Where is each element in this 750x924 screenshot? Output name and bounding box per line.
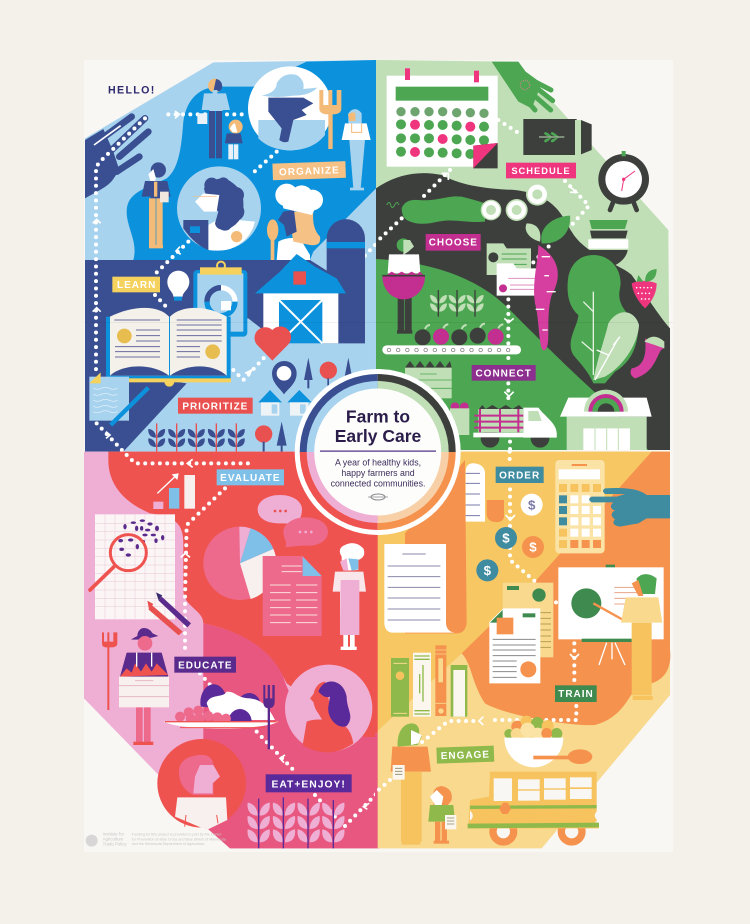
icon: document page [489, 608, 540, 683]
dotted path: hello [168, 108, 247, 120]
footer: credits [86, 832, 227, 847]
dotted path: connect [502, 299, 514, 362]
label: schedule [506, 163, 576, 178]
green hill [376, 259, 648, 450]
chart: pie [203, 527, 277, 600]
panel: bottom right orange quadrant [375, 452, 670, 848]
icon: hand [85, 117, 148, 198]
orange top right and blob [462, 452, 670, 725]
icon: calculator [555, 460, 605, 553]
icon: radish [526, 216, 570, 350]
dotted path: eat lower [315, 795, 335, 817]
icons: coins: $ [502, 531, 510, 546]
label: learn: LEARN [117, 280, 156, 291]
label: train: TRAIN [558, 689, 594, 700]
blue blob [127, 60, 376, 260]
inner ring: bottom left [307, 452, 378, 523]
icon: pitchfork [319, 90, 341, 149]
heading: hello: HELLO! [108, 85, 156, 97]
inner ring: bottom right [378, 452, 449, 523]
icon: silo [327, 219, 365, 343]
footer: credits: and the Minnesota Department of Agriculture. [132, 842, 205, 846]
icon: pointing hand [589, 488, 670, 527]
title text: Farm to [346, 406, 410, 426]
subtitle: happy farmers and [341, 468, 415, 478]
icon: fork [263, 685, 275, 749]
icon: farm truck [473, 405, 557, 448]
dotted path: engage left [418, 721, 473, 745]
dotted path: schedule [498, 120, 522, 135]
dotted path: train [568, 643, 580, 682]
icon: open book [106, 308, 231, 387]
footer: credits: Agriculture [103, 837, 124, 842]
chart: graph paper [95, 514, 175, 619]
title badge [295, 369, 461, 535]
icon: presentation board [558, 565, 664, 665]
pale green base [376, 60, 670, 450]
icon: pitchfork [102, 632, 117, 710]
chart: bars with arrow [153, 473, 195, 509]
icon: purple crayon [156, 592, 191, 627]
footer: credits: for Prevention at Blue Cross and Blue Shield of Minnesota [132, 837, 227, 841]
icon: magnifying glass [90, 535, 146, 590]
icon: red crayon [147, 601, 183, 635]
label: prioritize: PRIORITIZE [182, 401, 248, 412]
ring: top left [300, 374, 378, 452]
dot: chart link [554, 600, 558, 604]
icons: coins: $ [484, 563, 492, 578]
dotted path: truck [504, 442, 516, 453]
label: train [555, 685, 597, 702]
icons: houses [258, 390, 312, 416]
chevrons [181, 459, 369, 809]
dotted path: order down [510, 489, 537, 583]
icon: second crate [450, 402, 469, 435]
red left edge [375, 530, 378, 733]
dotted path: bottom left [377, 780, 390, 792]
icon: light bulb [167, 271, 189, 301]
label: engage: ENGAGE [441, 749, 490, 762]
badge ring [295, 369, 461, 535]
portrait: woman with glasses [177, 166, 261, 251]
icon: open document [263, 556, 322, 636]
icons: village trees [304, 358, 353, 388]
dotted path: organize [250, 152, 277, 176]
dotted path: evaluate down [185, 488, 225, 653]
label: evaluate: EVALUATE [220, 473, 280, 484]
dotted path: book [233, 357, 265, 380]
chevrons [442, 173, 577, 396]
dotted path: choose top [422, 170, 450, 198]
dotted path: schedule down [565, 181, 589, 225]
icon: bowls [588, 220, 628, 267]
person: farmer with crate [119, 628, 169, 745]
dotted path: folders [533, 243, 552, 262]
person: teacher [391, 723, 431, 845]
icon: chili pepper [631, 337, 664, 378]
yellow base [375, 452, 670, 848]
ring: top right [378, 374, 456, 452]
portrait: farmer in hat [248, 66, 332, 150]
icons: seedlings [430, 290, 484, 317]
label: learn [112, 277, 160, 292]
icon: notepad [89, 372, 129, 421]
icon: conveyor belt [382, 345, 521, 354]
dotted path: learn up [154, 242, 188, 275]
upper yellow [375, 452, 670, 733]
portrait: child [157, 739, 246, 830]
icon: receipt scroll [466, 463, 504, 522]
label: order [496, 467, 544, 483]
label: choose: CHOOSE [429, 238, 478, 249]
label: evaluate [217, 469, 284, 485]
icon: cucumber and slices [387, 183, 549, 224]
orange column [405, 460, 467, 633]
inner ring: top left [307, 381, 378, 452]
icons: apples [415, 324, 504, 345]
icon: pencil [111, 388, 148, 425]
dotted path: eat [257, 732, 297, 773]
chart: speech bubbles [258, 495, 328, 547]
label: order: ORDER [499, 471, 540, 482]
label: eat and enjoy [266, 774, 352, 792]
icon: heart [255, 326, 291, 361]
person: farmer with bowl [382, 238, 425, 334]
title text: Early Care [335, 426, 422, 446]
label: educate: EDUCATE [178, 660, 233, 671]
icons: coins: $ [529, 540, 537, 555]
icon: salad bowl [504, 716, 563, 767]
badge centre [314, 388, 441, 516]
icon: market stand [560, 390, 652, 450]
fold shading [84, 322, 673, 323]
subtitle: A year of healthy kids, [335, 458, 421, 468]
person: chef [267, 184, 323, 260]
person: man with clipboard [142, 162, 171, 248]
dark pink shape [203, 623, 380, 848]
dark hill [376, 173, 670, 450]
pink base [84, 452, 380, 848]
icon: crate [405, 361, 452, 398]
icons: coins [476, 494, 544, 581]
person: doctor [342, 109, 371, 190]
chevrons [93, 111, 353, 438]
label: eat and enjoy: EAT+ENJOY! [271, 779, 346, 790]
icons: tree pair [255, 422, 287, 452]
subtitle: connected communities. [331, 478, 425, 488]
icons: rows of plants [148, 423, 245, 452]
icons: wheat row [247, 797, 345, 848]
person: adult with bag [197, 79, 230, 158]
icons: coins: $ [528, 497, 536, 512]
label: connect [472, 365, 536, 381]
small emblem [368, 494, 388, 500]
chevrons [479, 515, 579, 725]
icon: green hand [492, 62, 553, 110]
person: child [225, 120, 243, 159]
label: prioritize [178, 398, 253, 414]
person: child with paper [428, 786, 456, 844]
icon: folders [487, 243, 540, 296]
dotted path: connect lower [502, 383, 514, 405]
icon: calendar [387, 68, 498, 168]
light blue base [85, 60, 376, 452]
dotted path: evaluate top [127, 455, 251, 463]
label: organize [272, 161, 346, 180]
icon: barn [255, 254, 346, 343]
panel: bottom left pink quadrant [84, 452, 380, 848]
icon: spoon [533, 749, 592, 764]
inner ring: top right [378, 381, 449, 452]
icon: map pin [272, 361, 297, 394]
icon: seed box [523, 119, 592, 155]
label: choose [426, 234, 481, 251]
navy band [85, 260, 328, 452]
label: educate [174, 657, 236, 673]
dotted path: engage [488, 706, 576, 720]
dotted path: wheat [345, 790, 380, 826]
dotted path: lower left [97, 423, 125, 453]
red shape [108, 452, 380, 750]
ring: bottom right [378, 452, 456, 530]
icon: plate of food [163, 684, 278, 729]
dotted path: choose left [375, 218, 402, 243]
label: organize: ORGANIZE [279, 165, 340, 178]
icon: lettuce [568, 255, 639, 383]
icon: alarm clock [598, 151, 649, 210]
label: schedule: SCHEDULE [511, 166, 571, 176]
person: chef in apron [333, 543, 366, 650]
poster sheet [84, 60, 673, 852]
icon: long letter [384, 544, 455, 633]
label: engage [436, 746, 494, 764]
portrait: woman [285, 665, 372, 752]
ring: bottom left [300, 452, 378, 530]
icon: school bus [468, 772, 599, 846]
icon: clipboard with donut chart [193, 262, 247, 337]
panel: top right green quadrant [375, 60, 670, 453]
pink left edge [375, 733, 378, 848]
icon: strawberry [632, 269, 657, 308]
dotted path: order [504, 452, 516, 462]
icon: green tabbed folder [503, 583, 553, 657]
person: trainer [621, 574, 662, 700]
label: connect: CONNECT [475, 369, 532, 380]
icons: books [391, 645, 467, 717]
dotted path: silo [342, 245, 375, 280]
panel: top left blue quadrant [85, 60, 376, 453]
dotted path: educate [200, 673, 212, 687]
footer: credits: Institute for [103, 832, 125, 837]
title rule [320, 450, 436, 452]
footer: credits: Trade Policy [103, 842, 127, 847]
dotted path: left side [96, 118, 145, 375]
icons: seeds scatter [118, 519, 164, 557]
dotted path: learn down [155, 295, 169, 310]
footer: credits: Funding for this project is provided in part by the Center [132, 833, 222, 837]
